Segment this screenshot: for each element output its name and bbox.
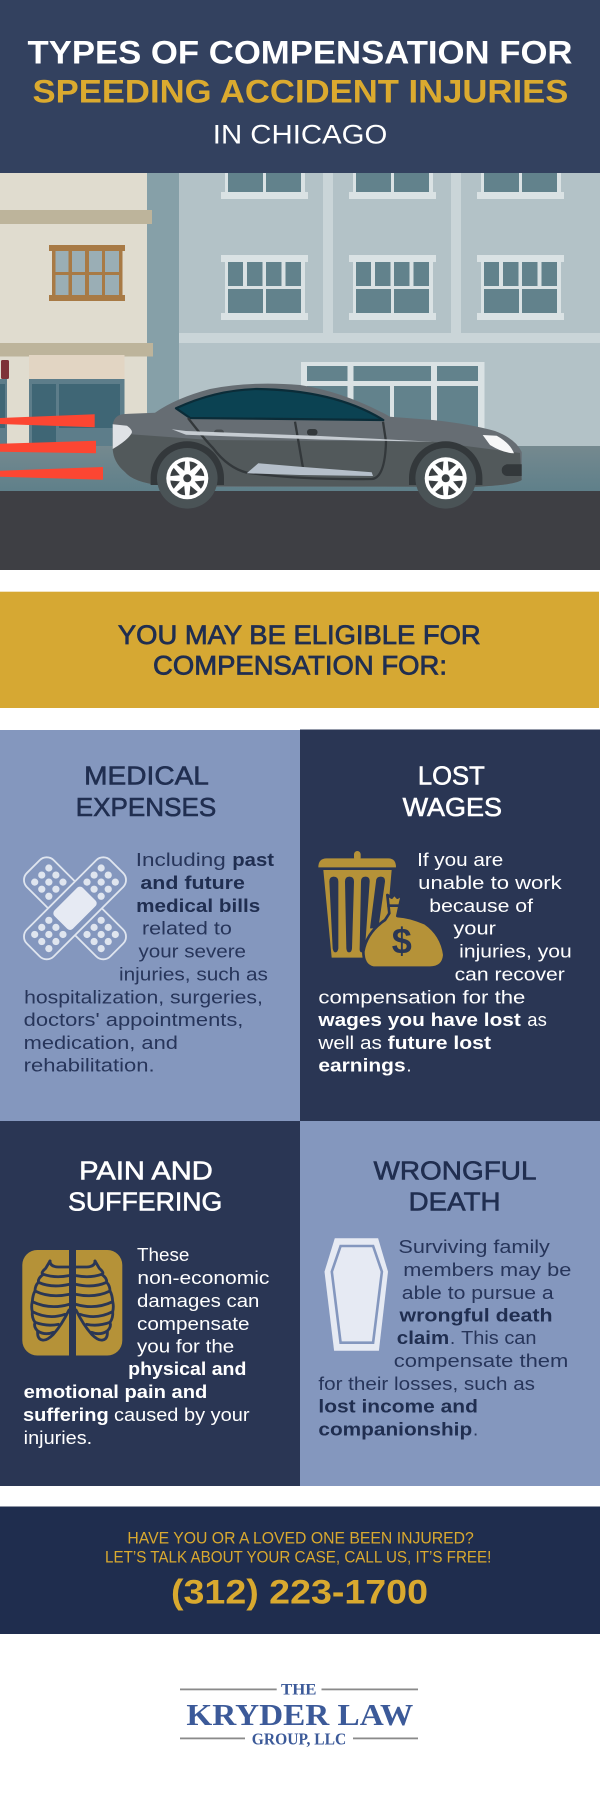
text: lost wages description: can recover (455, 963, 565, 984)
text: lost wages description: because of (429, 895, 534, 916)
header: title block: TYPES OF COMPENSATION FOR (28, 34, 572, 70)
text: wrongful death description: for their losses, such as (318, 1373, 535, 1394)
chrome line (172, 429, 433, 442)
text: pain and suffering description: compensate (137, 1313, 250, 1334)
road (0, 491, 600, 570)
text: pain and suffering description: injuries. (24, 1427, 92, 1448)
icon: coffin (324, 1238, 388, 1351)
icon: rib cage (22, 1250, 122, 1356)
text: wrongful death description (318, 1236, 571, 1440)
side window (176, 389, 383, 420)
logo: The Kryder Law Group, LLC (180, 1682, 418, 1749)
rear wheel (157, 448, 218, 509)
text: wrongful death description: able to pursue a (402, 1282, 554, 1303)
call to action (0, 1506, 600, 1634)
panel: pain and suffering (0, 1121, 300, 1486)
text: wrongful death description: claim (397, 1327, 449, 1348)
text: medical expenses description: your severe (138, 940, 246, 961)
text: medical expenses description: doctors' appointments, (24, 1009, 243, 1030)
sidewalk (0, 446, 600, 491)
header: title block: SPEEDING ACCIDENT INJURIES (32, 74, 568, 110)
heading: pain and suffering: PAIN AND (79, 1156, 213, 1186)
text: medical expenses description: medical bills (136, 895, 260, 916)
panel: wrongful death (300, 1121, 600, 1486)
text: pain and suffering description: These (137, 1244, 189, 1265)
car (113, 384, 522, 509)
door lines (188, 418, 386, 479)
text: wrongful death description: members may be (403, 1259, 571, 1280)
gold banner: YOU MAY BE ELIGIBLE FOR (118, 620, 481, 650)
lower body panel (113, 433, 522, 487)
text: pain and suffering description: emotional pain and (24, 1381, 207, 1402)
text: pain and suffering description (23, 1244, 269, 1448)
text: medical expenses description: rehabilitation. (24, 1054, 155, 1075)
text: medical expenses description: related to (142, 918, 232, 939)
call to action: LET’S TALK ABOUT YOUR CASE, CALL US, IT’S FREE! (105, 1547, 491, 1566)
text: pain and suffering description: non-economic (137, 1267, 269, 1288)
text: lost wages description: earnings (318, 1054, 406, 1075)
icon: bandages (20, 853, 130, 963)
text: lost wages description (317, 849, 572, 1075)
text: pain and suffering description: caused by your (114, 1404, 250, 1425)
text: pain and suffering description: you for the (137, 1335, 234, 1356)
beige building (0, 173, 153, 446)
car body (113, 384, 522, 487)
text: medical expenses description (24, 849, 274, 1075)
logo: The Kryder Law Group, LLC: THE (281, 1682, 316, 1699)
front wheel (415, 448, 476, 509)
text: lost wages description: future lost (388, 1032, 491, 1053)
text: wrongful death description: companionship (318, 1419, 472, 1440)
text: pain and suffering description: damages can (137, 1290, 259, 1311)
wheel arches (151, 441, 482, 485)
headlight (483, 435, 514, 453)
text: lost wages description: compensation for the (318, 986, 525, 1007)
panel: medical expenses (0, 730, 300, 1121)
text: wrongful death description: lost income and (318, 1396, 478, 1417)
text: lost wages description: injuries, you (459, 940, 572, 961)
heading: wrongful death (374, 1156, 536, 1217)
heading: lost wages: LOST (418, 761, 485, 791)
red speed streaks (0, 414, 103, 480)
call to action: HAVE YOU OR A LOVED ONE BEEN INJURED? (127, 1528, 474, 1547)
text: medical expenses description: Including (136, 849, 226, 870)
grey apartment building (179, 173, 600, 448)
panel: lost wages (300, 730, 600, 1121)
text: medical expenses description: injuries, such as (119, 963, 268, 984)
side alley strip (147, 173, 179, 448)
text: lost wages description: If you are (417, 849, 503, 870)
text: wrongful death description: This can (461, 1327, 536, 1348)
illustration: street scene with speeding car (0, 173, 600, 570)
call to action: (312) 223-1700 (171, 1573, 428, 1611)
text: medical expenses description: medication, and (24, 1032, 178, 1053)
text: wrongful death description: wrongful death (398, 1305, 553, 1326)
text: wrongful death description: Surviving family (398, 1236, 551, 1257)
heading: lost wages (403, 761, 502, 822)
text: lost wages description: . (406, 1054, 412, 1075)
text: lost wages description: well as (317, 1032, 382, 1053)
header: title block: IN CHICAGO (213, 120, 387, 150)
text: pain and suffering description: physical and (128, 1358, 246, 1379)
icon: trash can and money bag: $ (392, 921, 412, 962)
text: wrongful death description: compensate them (394, 1350, 568, 1371)
text: lost wages description: as (527, 1009, 547, 1030)
heading: lost wages: WAGES (403, 792, 502, 822)
text: medical expenses description: hospitalization, surgeries, (24, 986, 263, 1007)
heading: wrongful death: WRONGFUL (374, 1156, 536, 1186)
text: medical expenses description: and future (140, 872, 245, 893)
text: pain and suffering description: suffering (23, 1404, 109, 1425)
side sill (247, 463, 373, 476)
header: title block (0, 0, 600, 173)
heading: medical expenses: MEDICAL (84, 761, 209, 791)
heading: wrongful death: DEATH (409, 1187, 500, 1217)
logo: The Kryder Law Group, LLC: GROUP, LLC (252, 1730, 346, 1749)
heading: pain and suffering: SUFFERING (68, 1187, 222, 1217)
heading: pain and suffering (68, 1156, 222, 1217)
text: lost wages description: your (453, 918, 496, 939)
logo: The Kryder Law Group, LLC: KRYDER LAW (186, 1697, 413, 1732)
text: lost wages description: wages you have lost (317, 1009, 521, 1030)
heading: medical expenses: EXPENSES (76, 792, 216, 822)
text: wrongful death description: . (473, 1419, 478, 1440)
icon: trash can and money bag (318, 851, 444, 968)
text: medical expenses description: past (232, 849, 274, 870)
heading: medical expenses (76, 761, 216, 822)
door handles (214, 429, 318, 436)
gold banner: COMPENSATION FOR: (153, 651, 447, 681)
front grille (502, 464, 522, 476)
tail light (113, 424, 132, 449)
gold banner (0, 592, 599, 708)
text: wrongful death description: . (450, 1327, 455, 1348)
text: lost wages description: unable to work (418, 872, 563, 893)
